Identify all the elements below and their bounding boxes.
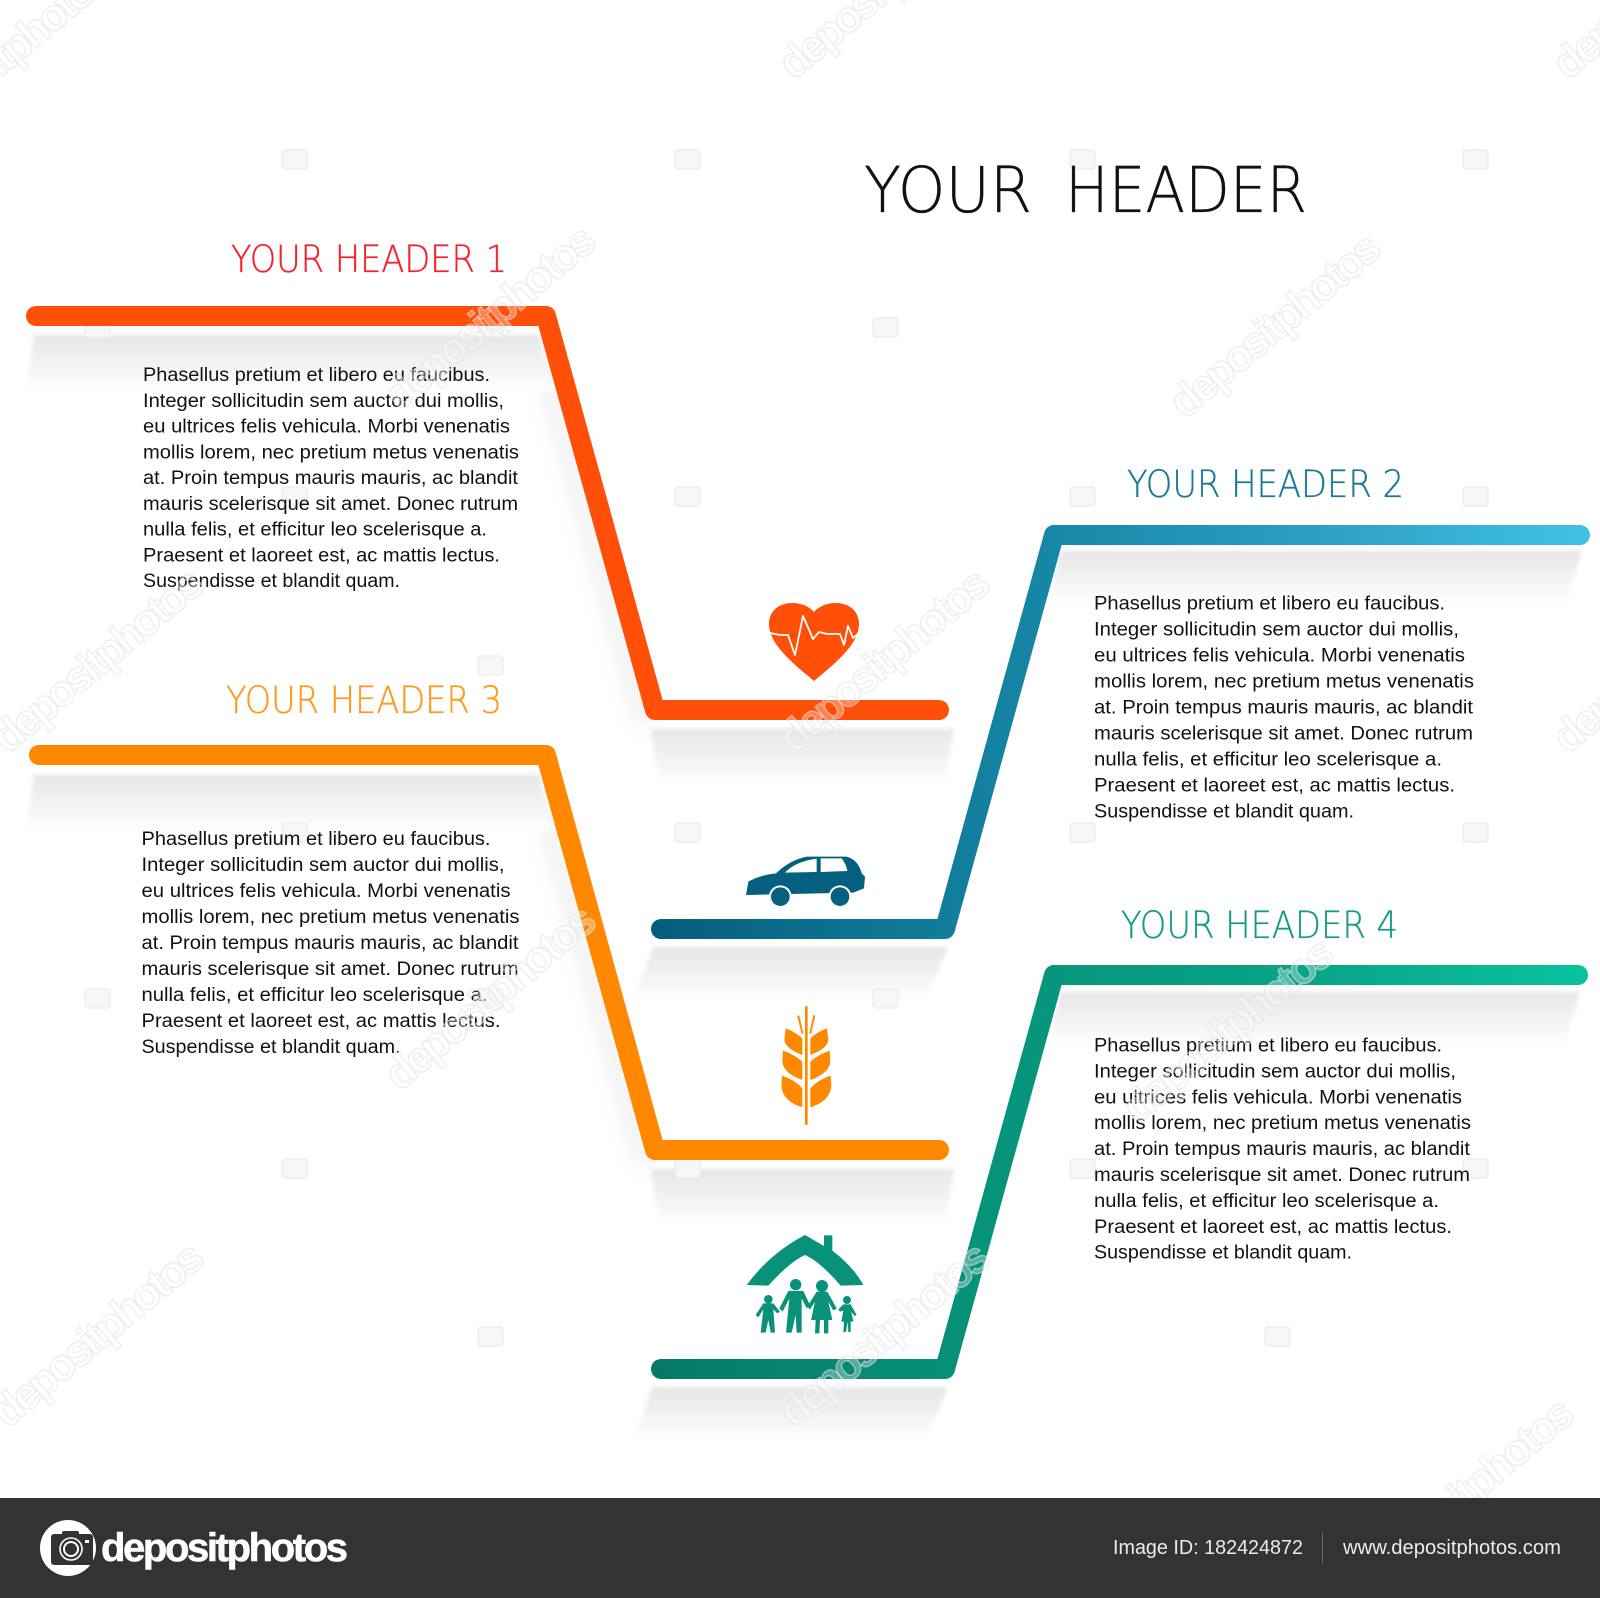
icon: wheat [781,1006,831,1125]
text block 4: Praesent et laoreet est, ac mattis lectus. [1094,1217,1452,1238]
text block 1: Integer sollicitudin sem auctor dui mollis, [143,391,504,412]
text block 4: at. Proin tempus mauris mauris, ac blandit [1094,1139,1471,1160]
line 1 orange-red [36,316,939,710]
text block 2: Suspendisse et blandit quam. [1094,802,1354,822]
text: depositphotos [375,895,606,1100]
text block 3: at. Proin tempus mauris mauris, ac blandit [142,933,519,954]
text block 1: mauris scelerisque sit amet. Donec rutrum [143,494,518,515]
icon: heart with ECG [769,603,859,681]
text block 1 [143,365,519,592]
text block 2: mauris scelerisque sit amet. Donec rutrum [1094,724,1473,744]
text block 4: nulla felis, et efficitur leo scelerisque a. [1094,1191,1439,1212]
text block 2 [1094,594,1474,822]
text block 2: Integer sollicitudin sem auctor dui mollis, [1094,620,1459,640]
text block 4: Suspendisse et blandit quam. [1094,1243,1352,1264]
text block 3: Suspendisse et blandit quam. [142,1037,400,1058]
line 3 orange [39,755,939,1150]
text block 3 [142,829,520,1058]
text: depositphotos [769,1232,1000,1437]
text block 1: Praesent et laoreet est, ac mattis lectus. [143,545,500,566]
text block 2: at. Proin tempus mauris mauris, ac blandit [1094,698,1474,718]
text block 1: nulla felis, et efficitur leo scelerisque a. [143,520,487,540]
title: HEADER [1065,154,1307,227]
text block 3: mollis lorem, nec pretium metus venenatis [142,907,520,928]
logo icon: camera [40,1520,96,1576]
text: depositphotos [1113,928,1344,1133]
line 4 green [661,975,1578,1369]
text block 2: mollis lorem, nec pretium metus venenatis [1094,672,1474,692]
text block 1: mollis lorem, nec pretium metus venenatis [143,442,519,463]
text block 3: Integer sollicitudin sem auctor dui mollis, [142,855,504,876]
text block 3: nulla felis, et efficitur leo scelerisque a. [142,985,488,1006]
text block 1: Phasellus pretium et libero eu faucibus. [143,365,490,386]
icon: house with family [747,1235,863,1333]
shadow group [26,335,1582,1442]
text: depositphotos [769,558,1000,763]
text block 1: Suspendisse et blandit quam. [143,571,400,592]
text block 2: nulla felis, et efficitur leo scelerisque a. [1094,750,1442,770]
image id: Image ID: 182424872 [1113,1537,1303,1559]
text block 4 [1094,1036,1471,1264]
heading 4: YOUR HEADER 4 [1121,904,1398,947]
website url: www.depositphotos.com [1342,1537,1561,1559]
text block 3: mauris scelerisque sit amet. Donec rutrum [142,959,518,980]
text block 4: Phasellus pretium et libero eu faucibus. [1094,1036,1442,1056]
title: YOUR [864,154,1032,227]
icon: car [746,857,865,908]
title [864,154,1307,227]
heading 1: YOUR HEADER 1 [231,238,507,281]
text block 4: eu ultrices felis vehicula. Morbi venenatis [1094,1087,1462,1108]
text block 1: eu ultrices felis vehicula. Morbi venenatis [143,416,510,438]
text block 4: mollis lorem, nec pretium metus venenatis [1094,1113,1471,1134]
text block 3: eu ultrices felis vehicula. Morbi venenatis [142,881,511,902]
text block 3: Phasellus pretium et libero eu faucibus. [142,829,490,850]
text block 3: Praesent et laoreet est, ac mattis lectus. [142,1011,501,1032]
text block 4: mauris scelerisque sit amet. Donec rutrum [1094,1165,1470,1186]
text block 2: Praesent et laoreet est, ac mattis lectus. [1094,776,1455,796]
text: depositphotos [1160,223,1391,428]
footer bar [0,1498,1600,1598]
text block 1: at. Proin tempus mauris mauris, ac blandit [143,468,519,489]
line 2 blue [661,535,1580,929]
text: depositphotos [375,215,606,420]
logo wordmark: depositphotos [101,1526,348,1570]
heading 3: YOUR HEADER 3 [226,679,502,722]
text: depositphotos [1353,1388,1584,1593]
text block 2: Phasellus pretium et libero eu faucibus. [1094,594,1445,614]
heading 2: YOUR HEADER 2 [1127,463,1404,506]
text block 4: Integer sollicitudin sem auctor dui mollis, [1094,1061,1456,1082]
text block 2: eu ultrices felis vehicula. Morbi venenatis [1094,646,1465,666]
